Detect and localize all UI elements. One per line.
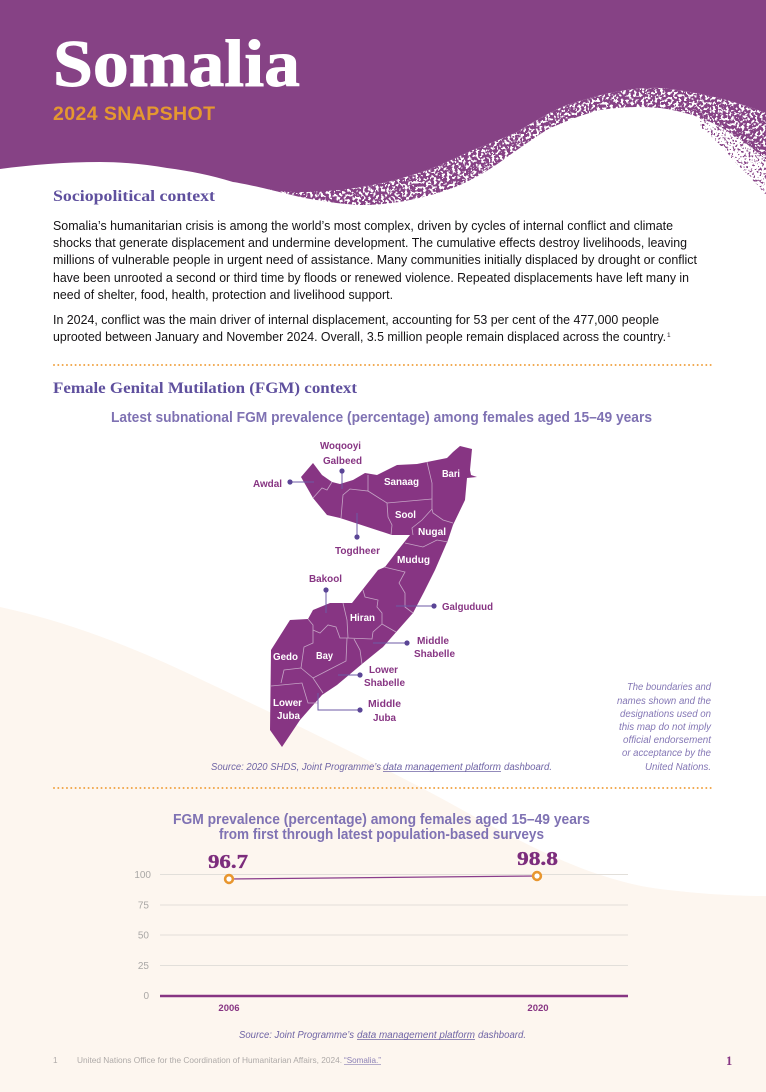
region labels inside map: Mudug <box>397 554 430 566</box>
map disclaimer: names shown and the <box>617 696 712 707</box>
value 2020: 98.8 <box>517 849 558 870</box>
subtitle: 2024 SNAPSHOT <box>53 103 215 125</box>
region labels outside map: Lower <box>369 664 398 676</box>
baseline axis <box>160 995 628 997</box>
country shape <box>270 446 477 747</box>
text block: 2024 displacement <box>53 313 671 344</box>
map source note: Source: 2020 SHDS, Joint Programme’s <box>211 762 381 773</box>
region labels outside map: Bakool <box>309 573 342 585</box>
text block: 2024 displacement: uprooted between January and November 2024. Overall, 3.5 million people remain displaced across the country. <box>53 330 666 344</box>
y axis labels: 50 <box>138 930 149 942</box>
region labels inside map <box>273 468 460 722</box>
region labels inside map: Nugal <box>418 526 446 538</box>
cream background wave <box>0 607 766 1092</box>
region labels outside map: Shabelle <box>414 648 455 660</box>
y axis labels: 75 <box>138 900 149 912</box>
chart title <box>173 812 590 843</box>
map disclaimer: this map do not imply <box>619 722 712 733</box>
region labels inside map: Lower <box>273 697 302 709</box>
y axis labels: 100 <box>134 870 151 881</box>
map: Somalia regions <box>253 440 493 747</box>
region labels outside map: Galbeed <box>323 455 362 467</box>
map disclaimer: designations used on <box>620 709 711 720</box>
chart title: FGM prevalence (percentage) among females aged 15–49 years <box>173 812 590 828</box>
footnote: United Nations Office for the Coordination of Humanitarian Affairs, 2024. <box>77 1056 342 1065</box>
text block: crisis overview <box>53 219 698 302</box>
region labels outside map: Middle <box>368 698 401 710</box>
page number: 1 <box>726 1054 732 1068</box>
leader lines <box>290 471 434 710</box>
title: Somalia <box>53 27 300 101</box>
grid lines <box>160 874 628 966</box>
region labels inside map: Bay <box>316 650 333 662</box>
map disclaimer: United Nations. <box>645 762 711 773</box>
region labels inside map: Sanaag <box>384 476 419 488</box>
region labels outside map: Togdheer <box>335 545 380 557</box>
chart source note: dashboard. <box>478 1030 526 1041</box>
map disclaimer: The boundaries and <box>627 682 712 693</box>
map source note <box>211 762 552 773</box>
text block: crisis overview: have been unrooted a second or third time by floods or renewed violence. Repeated displacements have left many in <box>53 271 689 285</box>
chart source note <box>239 1030 526 1041</box>
y axis labels <box>134 870 151 1002</box>
map source note: dashboard. <box>504 762 552 773</box>
map source note: data management platform <box>383 762 501 773</box>
region labels inside map: Sool <box>395 509 416 521</box>
region labels inside map: Juba <box>277 710 300 722</box>
text block: crisis overview: shocks that generate displacement and undermine development. The cumulative effects destroy livelihoods, leaving <box>53 236 687 250</box>
region labels inside map: Gedo <box>273 651 298 663</box>
footnote: 1 <box>53 1056 58 1065</box>
footnote: “Somalia.” <box>344 1056 381 1065</box>
x axis labels: 2020 <box>527 1003 549 1014</box>
region labels outside map: Shabelle <box>364 677 405 689</box>
data line <box>229 876 537 879</box>
region labels outside map: Juba <box>373 712 396 724</box>
map disclaimer: official endorsement <box>623 735 712 746</box>
text block: 2024 displacement: 1 <box>667 332 671 339</box>
x axis labels <box>218 1003 549 1014</box>
region labels outside map: Awdal <box>253 478 282 490</box>
text block: crisis overview: Somalia’s humanitarian crisis is among the world’s most complex, driven by cycles of internal conflict and climate <box>53 219 673 233</box>
x axis labels: 2006 <box>218 1003 240 1014</box>
chart source note: Source: Joint Programme’s <box>239 1030 354 1041</box>
region labels inside map: Hiran <box>350 612 375 624</box>
region labels outside map <box>253 440 493 724</box>
text block: crisis overview: millions of vulnerable people in urgent need of assistance. Many communities initially displaced by drought or conflict <box>53 253 698 267</box>
chart title: from first through latest population-based surveys <box>219 827 544 843</box>
region labels outside map: Woqooyi <box>320 440 361 452</box>
map disclaimer <box>617 682 712 773</box>
y axis labels: 25 <box>138 961 149 972</box>
region labels outside map: Galguduud <box>442 601 493 613</box>
text block: 2024 displacement: In 2024, conflict was the main driver of internal displacement, accounting for 53 per cent of the 477,000 people <box>53 313 659 327</box>
data point 2006 <box>225 875 233 883</box>
region labels outside map: Middle <box>417 635 449 647</box>
region boundaries <box>271 462 453 703</box>
map disclaimer: or acceptance by the <box>622 748 712 759</box>
region labels inside map: Bari <box>442 468 460 480</box>
heading: sociopolitical context: Sociopolitical context <box>53 188 216 205</box>
text block: crisis overview: need of shelter, food, health, protection and livelihood support. <box>53 288 393 302</box>
map title: Latest subnational FGM prevalence (percentage) among females aged 15–49 years <box>111 410 652 426</box>
leader dots <box>287 468 437 713</box>
heading: FGM context: Female Genital Mutilation (FGM) context <box>53 380 358 397</box>
header banner <box>0 0 766 205</box>
y axis labels: 0 <box>143 991 149 1002</box>
value 2006: 96.7 <box>208 852 248 873</box>
data point 2020 <box>533 872 541 880</box>
chart source note: data management platform <box>357 1030 475 1041</box>
line chart <box>134 849 628 1014</box>
